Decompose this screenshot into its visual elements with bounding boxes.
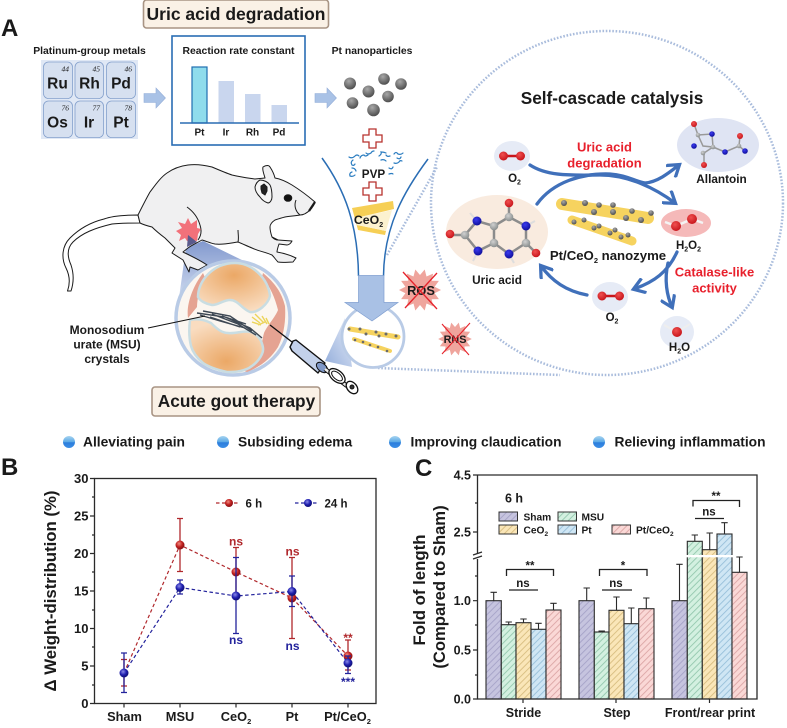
bar chart: fold of length: 6 h: [505, 492, 523, 506]
uric acid molecule: [446, 199, 540, 287]
bars group: Step: [579, 588, 654, 699]
heading: Uric acid degradation: [144, 0, 328, 28]
icon: CeO2 sheet: [352, 201, 394, 235]
icon: PVP polymer: [349, 151, 403, 181]
icon: ROS crossed out: [399, 270, 441, 310]
zoom wedge to nanozyme: [325, 318, 352, 367]
icon: PVP polymer: PVP: [362, 168, 385, 181]
line chart: weight distribution: Pt/CeO: [324, 709, 367, 724]
bar chart: fold of length: 2.5: [454, 526, 471, 540]
significance marks: ns: [285, 544, 300, 558]
zoom wedge from rat knee to joint: [177, 241, 248, 312]
line chart: weight distribution: 15: [74, 584, 88, 598]
bar chart: fold of length: **: [712, 491, 721, 503]
bar chart: fold of length: ns: [609, 578, 623, 590]
panel: Pt nanoparticles: Pt nanoparticles: [332, 46, 413, 57]
bar chart: fold of length: Stride: [506, 706, 541, 720]
bar chart: fold of length: *: [621, 560, 626, 572]
line chart: weight distribution: CeO: [221, 709, 247, 724]
benefit list: Alleviating pain: [83, 434, 185, 450]
bar chart: fold of length: Fold of length: [410, 535, 429, 645]
arrow: rate chart to nanoparticles: [315, 88, 336, 108]
bar chart: fold of length: 1.0: [454, 594, 471, 608]
dotted catalysis circle: [378, 31, 783, 375]
panel: platinum-group metals: 78: [124, 104, 132, 112]
molecule blobs: [446, 118, 759, 348]
panel: platinum-group metals: [33, 46, 146, 139]
red labels: Catalase-like: [675, 264, 754, 280]
bar chart: fold of length: Pt: [582, 526, 592, 536]
bar chart: fold of length: CeO: [524, 526, 544, 536]
line chart: weight distribution: 2: [247, 717, 251, 726]
panel: platinum-group metals: Os: [47, 114, 68, 132]
allantoin molecule: [691, 121, 748, 186]
bar chart: fold of length: Pt/CeO: [636, 526, 670, 536]
H2O molecule: 2: [677, 348, 681, 356]
panel: platinum-group metals: Pd: [111, 76, 131, 92]
panel: platinum-group metals: 45: [92, 64, 100, 74]
H2O2 molecule: 2: [684, 246, 688, 254]
label: MSU crystals: Monosodium: [70, 323, 144, 337]
funnel: [322, 158, 428, 276]
panel: platinum-group metals: Platinum-group metals: [33, 46, 146, 57]
significance marks: ns: [285, 639, 300, 653]
H2O2 molecule: H: [676, 240, 684, 252]
panel: platinum-group metals: 46: [124, 64, 132, 74]
bars group: Front/rear print: [672, 523, 747, 699]
benefit list: Improving claudication: [410, 434, 562, 450]
cascade arrows: [530, 165, 679, 307]
nanozyme rods: [561, 200, 654, 241]
legend: [499, 512, 630, 534]
arrow: funnel down: [345, 276, 398, 321]
significance brackets: [506, 500, 740, 590]
line chart: weight distribution: 0: [81, 696, 88, 711]
benefit list: Relieving inflammation: [614, 434, 766, 450]
uric acid molecule: Uric acid: [472, 273, 522, 287]
panel: platinum-group metals: Pt: [113, 114, 129, 132]
legend: 6 h: [246, 498, 262, 510]
bars group: Stride: [486, 592, 561, 699]
line chart: weight distribution: 10: [74, 621, 88, 636]
significance marks: ns: [229, 633, 243, 647]
bar chart: fold of length: Front/rear print: [665, 706, 756, 720]
series: 24 h: [120, 558, 352, 692]
nanozyme inset: [342, 306, 404, 368]
panel: reaction rate constant: Ir: [223, 128, 229, 138]
label: MSU crystals: urate (MSU): [73, 338, 141, 352]
line chart: weight distribution: Δ Weight-distribution (%): [41, 491, 60, 691]
panel: Pt nanoparticles: [332, 46, 413, 116]
bar chart: fold of length: 0.0: [454, 692, 471, 706]
illustration: knee joint: [176, 261, 290, 375]
icon: RNS crossed out: [438, 323, 472, 355]
H2O2 molecule: O: [688, 240, 697, 252]
panel: reaction rate constant: Reaction rate constant: [182, 46, 295, 57]
icon: pain burst: [176, 218, 201, 247]
bar chart: fold of length: **: [526, 560, 535, 572]
significance marks: [229, 534, 355, 689]
line chart: weight distribution: 20: [74, 546, 88, 561]
red labels: activity: [692, 280, 738, 296]
bar chart: fold of length: 0.5: [454, 644, 471, 658]
line chart: weight distribution: MSU: [166, 709, 194, 724]
panel: self-cascade catalysis: nanozyme: [598, 248, 666, 263]
panel: self-cascade catalysis: [446, 88, 759, 356]
significance marks: **: [343, 631, 353, 645]
panel: platinum-group metals: 76: [62, 104, 69, 112]
icon: ROS crossed out: ROS: [407, 283, 435, 298]
icon: plus sign: [363, 182, 382, 201]
red labels: degradation: [567, 156, 642, 170]
legend: 24 h: [324, 498, 348, 510]
panel: reaction rate constant: Rh: [246, 128, 259, 138]
panel C label: C: [415, 455, 432, 482]
bar chart: fold of length: ns: [702, 506, 716, 518]
icon: CeO2 sheet: 2: [379, 222, 383, 229]
legend: [216, 498, 348, 510]
line chart: weight distribution: 25: [74, 508, 88, 524]
H2O molecule: H: [669, 342, 677, 354]
bar chart: fold of length: MSU: [582, 512, 604, 524]
panel: reaction rate constant: Pd: [273, 128, 285, 138]
line chart: weight distribution: 5: [81, 658, 88, 674]
arrow: metals to rate chart: [144, 88, 166, 108]
bar chart: fold of length: 2: [670, 531, 674, 538]
heading: Uric acid degradation: Uric acid degradation: [147, 4, 325, 24]
panel B label: B: [1, 454, 18, 481]
illustration: rat: [63, 165, 315, 291]
panel: reaction rate constant: [172, 36, 305, 145]
line chart: weight distribution: Sham: [107, 709, 142, 724]
label: MSU crystals: crystals: [84, 352, 130, 366]
panel: reaction rate constant: Pt: [194, 128, 205, 138]
O2 molecule top: 2: [517, 180, 521, 186]
icon: RNS crossed out: RNS: [444, 334, 466, 346]
O2 molecule top: O: [508, 173, 517, 185]
benefit list: Subsiding edema: [238, 434, 353, 450]
panel: self-cascade catalysis: 2: [594, 256, 598, 265]
illustration: syringe: [270, 325, 360, 396]
bar chart: fold of length: 4.5: [454, 468, 471, 482]
panel: platinum-group metals: Ir: [84, 114, 94, 132]
axes: [478, 475, 757, 699]
series: 6 h: [121, 518, 352, 686]
O2 molecule lower: [598, 292, 624, 326]
bar chart: fold of length: (Compared to Sham): [430, 505, 449, 669]
benefit list: [63, 434, 766, 450]
panel: self-cascade catalysis: Pt/CeO: [550, 248, 594, 263]
panel: platinum-group metals: 44: [62, 64, 69, 74]
significance marks: ***: [341, 675, 355, 689]
heading: Acute gout therapy: Acute gout therapy: [158, 391, 316, 411]
bar chart: fold of length: 2: [544, 531, 548, 538]
panel: platinum-group metals: Ru: [47, 76, 68, 92]
H2O2 molecule: [665, 214, 703, 254]
icon: CeO2 sheet: CeO: [354, 213, 379, 227]
bar chart: fold of length: Sham: [524, 512, 551, 524]
heading: Acute gout therapy: [152, 387, 320, 416]
O2 molecule lower: O: [606, 312, 615, 324]
line chart: weight distribution: [41, 471, 376, 726]
significance marks: ns: [229, 534, 243, 548]
O2 molecule top: [499, 152, 525, 186]
label: MSU crystals: [70, 316, 205, 366]
line chart: weight distribution: 2: [367, 717, 371, 726]
icon: plus sign: [363, 129, 382, 148]
red labels: [567, 140, 754, 296]
H2O molecule: [664, 324, 690, 356]
panel: platinum-group metals: Rh: [79, 76, 100, 92]
allantoin molecule: Allantoin: [696, 172, 747, 186]
panel: self-cascade catalysis: Self-cascade catalysis: [521, 88, 703, 108]
line chart: weight distribution: Pt: [286, 709, 299, 724]
bar chart: fold of length: [410, 468, 757, 720]
H2O2 molecule: 2: [697, 246, 701, 254]
H2O molecule: O: [681, 342, 690, 354]
line chart: weight distribution: 30: [74, 471, 88, 486]
panel A label: A: [1, 15, 18, 42]
bar chart: fold of length: ns: [516, 578, 530, 590]
panel: platinum-group metals: 77: [92, 104, 100, 112]
O2 molecule lower: 2: [615, 318, 619, 326]
bar chart: fold of length: Step: [603, 706, 631, 720]
red labels: Uric acid: [577, 140, 632, 154]
